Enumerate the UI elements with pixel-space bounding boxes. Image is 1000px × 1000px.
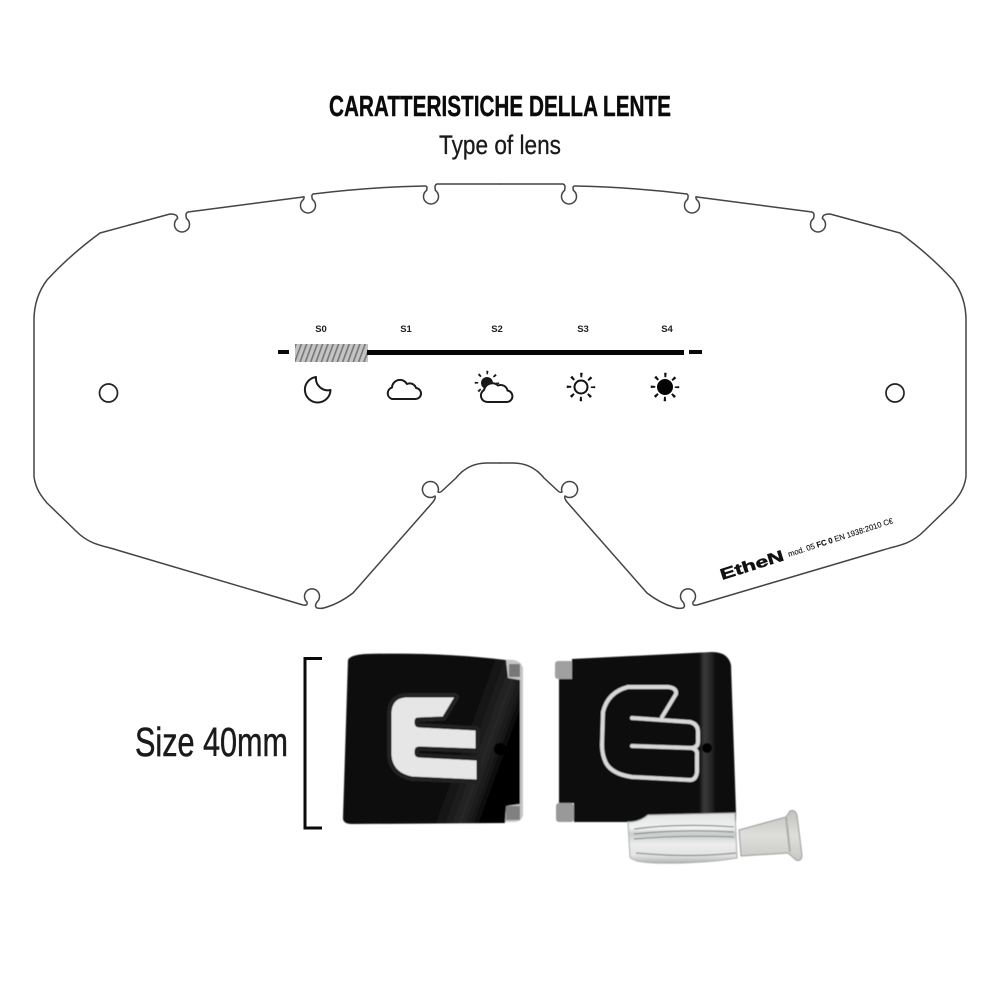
brand name: EtheN (718, 548, 786, 584)
clear corner pieces (555, 661, 574, 679)
subtitle: Type of lens (439, 130, 561, 160)
clip body (559, 652, 736, 822)
right mounting hole (886, 384, 904, 402)
valve stem (739, 810, 802, 860)
icon: sun behind cloud (476, 372, 512, 402)
white logo (391, 697, 477, 780)
scale labels: S2 (491, 324, 503, 335)
icon: moon (305, 377, 330, 402)
size bracket (305, 658, 322, 828)
screw dot (702, 743, 712, 753)
clear corner pieces (505, 660, 523, 822)
logo halo (391, 697, 477, 780)
size label: Size 40mm (135, 719, 288, 765)
scale labels: S0 (315, 324, 327, 335)
photo: right clip (555, 652, 802, 863)
scale right dash (689, 350, 702, 354)
outlined logo (602, 687, 698, 780)
scale labels: S1 (400, 324, 413, 335)
certification text: mod. 05 FC 0 EN 1938:2010 C€ (787, 516, 895, 559)
scale labels: S3 (577, 324, 589, 335)
scale labels (315, 324, 674, 335)
clip body (343, 654, 520, 824)
icon: sun filled (653, 375, 677, 399)
photo: left clip (343, 654, 523, 824)
scale left dash (278, 350, 289, 354)
icon: cloud (388, 380, 421, 399)
icon: sun outline (569, 375, 593, 399)
lens outline (34, 184, 966, 608)
scale labels: S4 (661, 324, 674, 335)
transparent cylinder (628, 813, 737, 863)
scale hatched S0 segment (295, 344, 368, 362)
filter category scale (278, 324, 702, 362)
lens brand marking (718, 516, 895, 584)
scale solid bar (367, 350, 684, 355)
screw dot (494, 743, 506, 755)
left mounting hole (100, 384, 118, 402)
title: CARATTERISTICHE DELLA LENTE (329, 91, 671, 123)
